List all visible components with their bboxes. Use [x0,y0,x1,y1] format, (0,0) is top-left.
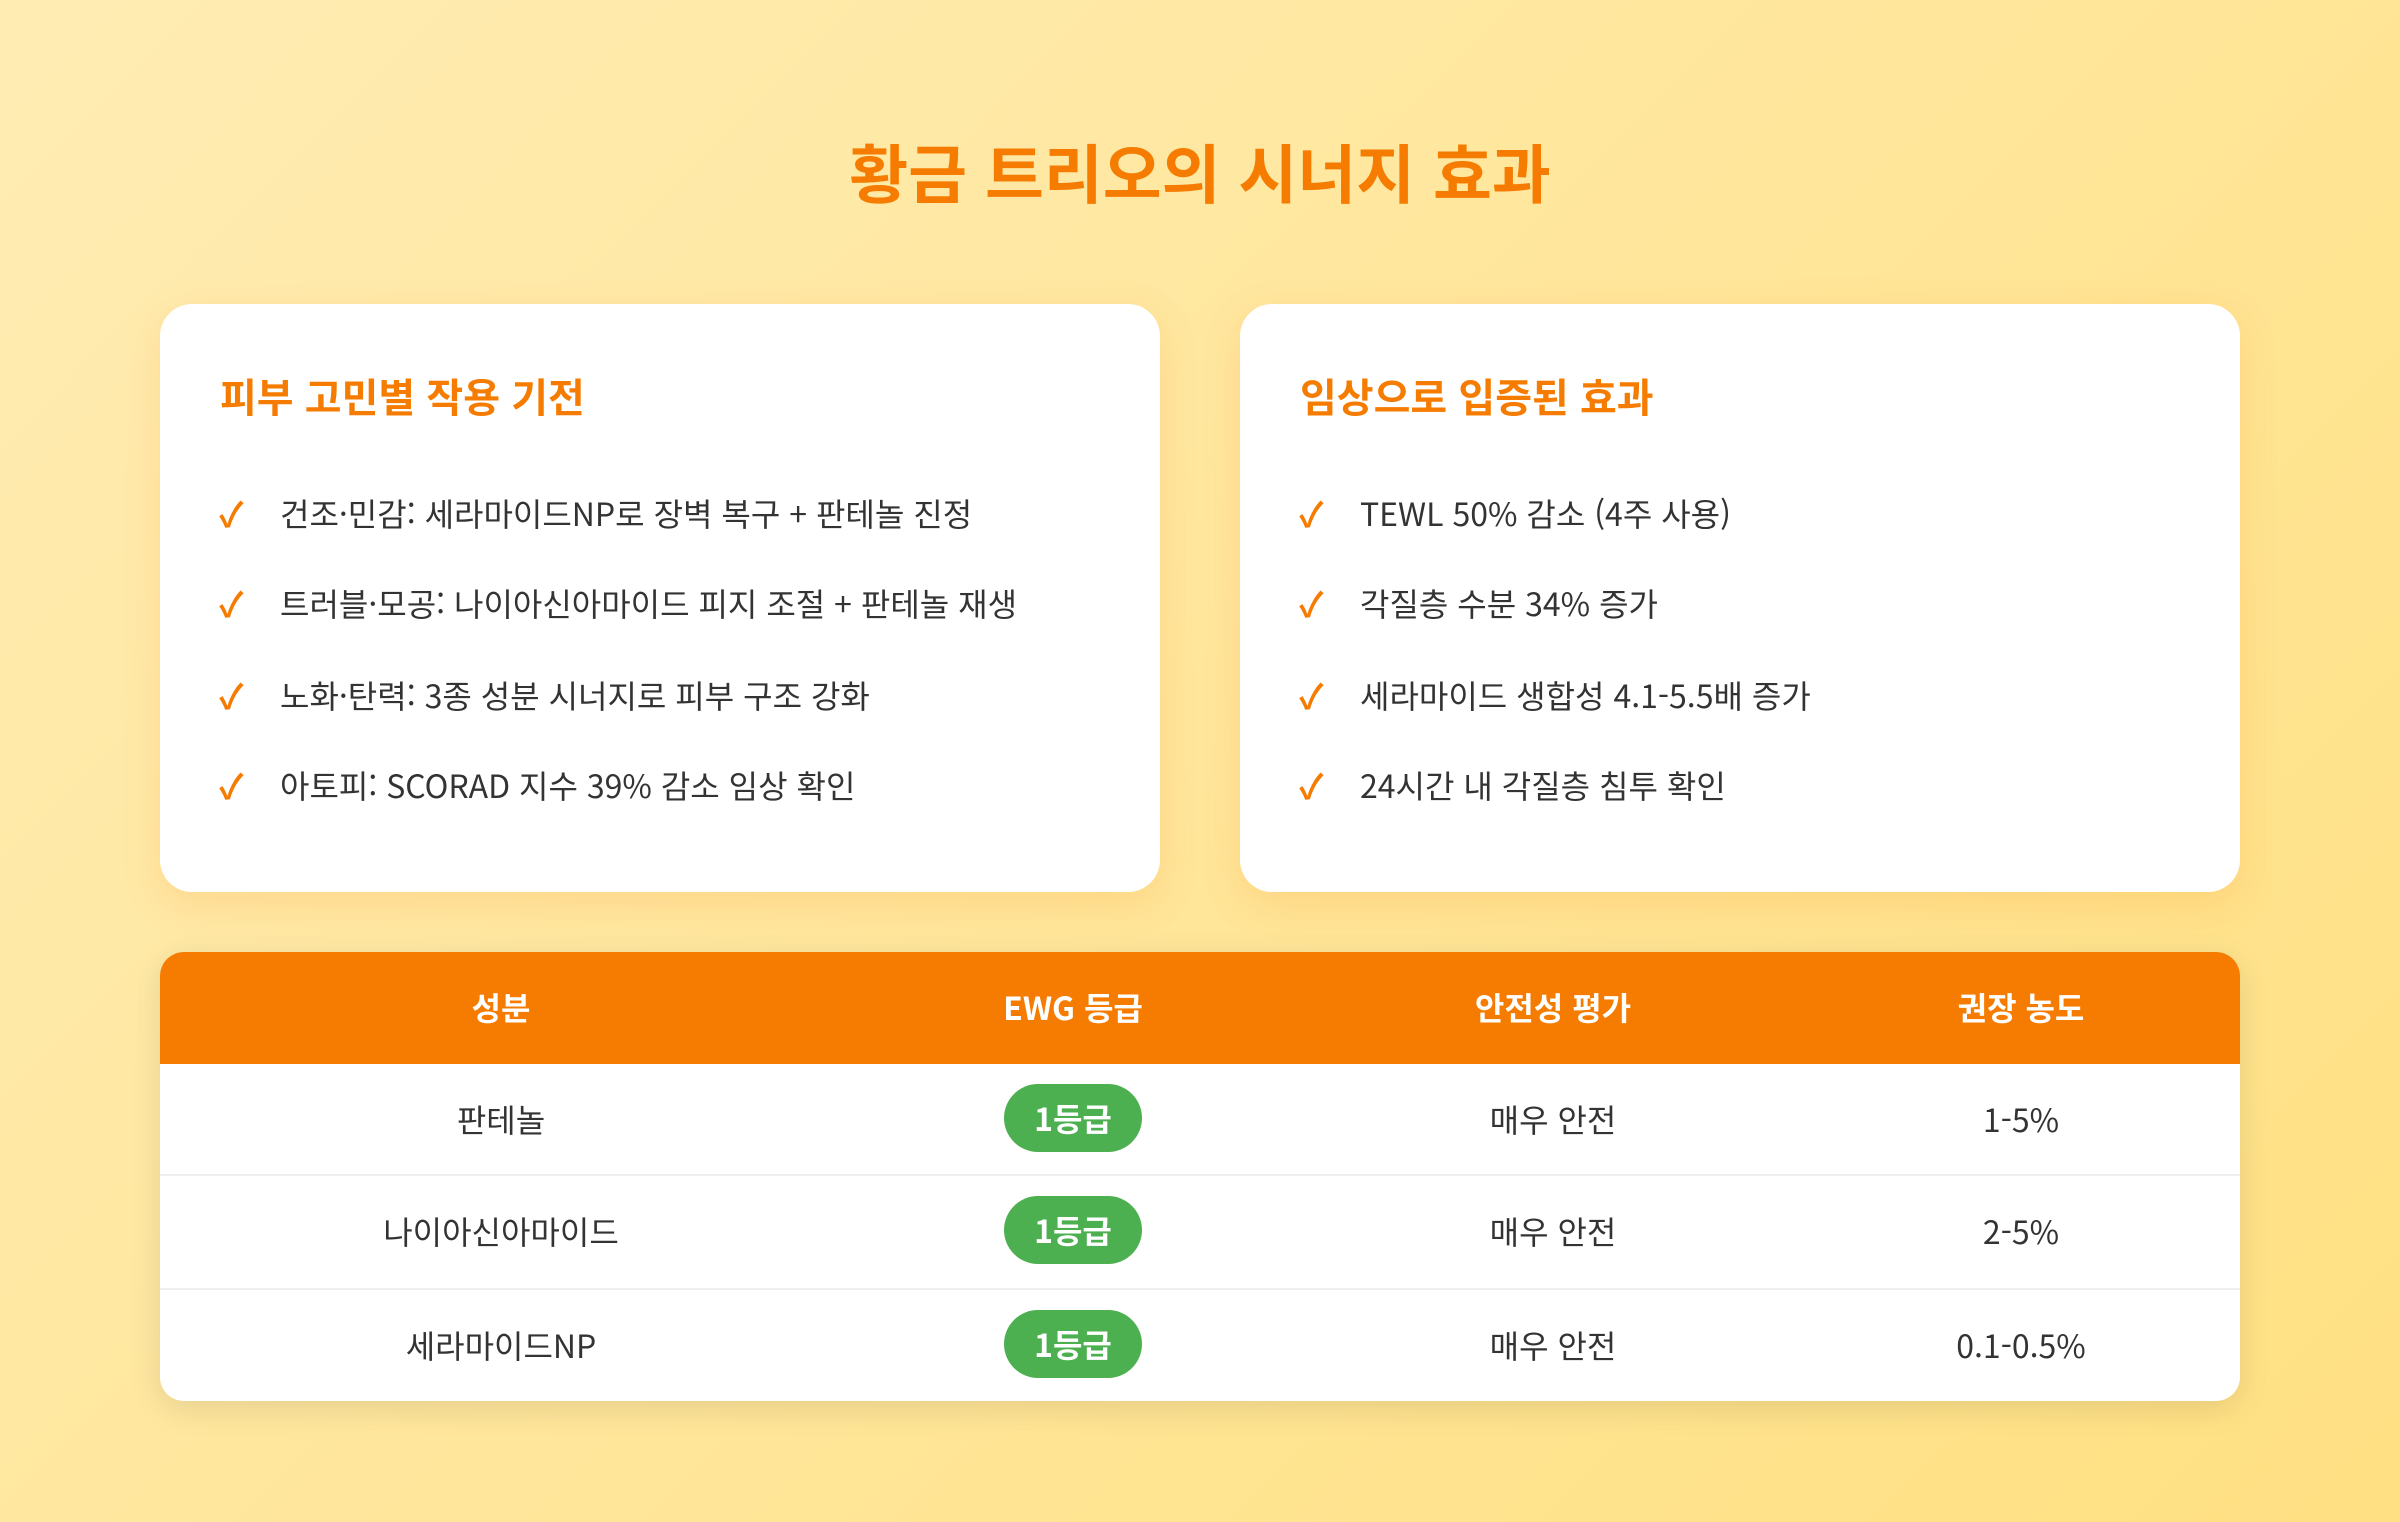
list item: aging and elasticity: ✓ [219,670,244,719]
table row: ceramide NP: 0.1-0.5% [1956,1322,2086,1368]
panel: clinically proven effects [1240,304,2240,892]
list item: penetration: 24시간 내 각질층 침투 확인 [1360,762,1726,808]
list item: dry and sensitive: ✓ [219,488,244,537]
title: 황금 트리오의 시너지 효과 [849,125,1551,217]
table header row: 성분 [472,984,530,1030]
list item: acne and pores: 트러블·모공: 나이아신아마이드 피지 조절 + 판테놀 재생 [280,580,1017,626]
table row: ceramide NP: 세라마이드NP [406,1322,596,1368]
grade badge [1004,1310,1142,1378]
table: ingredient safety [160,952,2240,1401]
list item: hydration: ✓ [1299,578,1324,627]
table row: niacinamide [383,1196,2059,1264]
list item: TEWL: ✓ [1299,488,1324,537]
grade badge: 1등급 [1034,1095,1112,1141]
panel heading: mechanism: 피부 고민별 작용 기전 [220,366,585,424]
list item: ceramide synthesis: ✓ [1299,670,1324,719]
table row: niacinamide: 매우 안전 [1490,1208,1616,1254]
table row: ceramide NP: 매우 안전 [1490,1322,1616,1368]
table row: panthenol [457,1084,2059,1152]
list item: acne and pores: ✓ [219,578,244,627]
table header row: EWG 등급 [1003,984,1143,1030]
table row: panthenol: 1-5% [1983,1096,2059,1142]
panel heading: clinical effects: 임상으로 입증된 효과 [1300,366,1654,424]
list item: atopy: ✓ [219,760,244,809]
table row: niacinamide: 나이아신아마이드 [383,1208,619,1254]
table row: ceramide NP [406,1310,2086,1378]
table row: panthenol: 매우 안전 [1490,1096,1616,1142]
list item: ceramide synthesis: 세라마이드 생합성 4.1-5.5배 증가 [1360,672,1811,718]
grade badge: 1등급 [1034,1321,1112,1367]
grade badge [1004,1084,1142,1152]
table header row: 안전성 평가 [1475,984,1631,1030]
list item: atopy: 아토피: SCORAD 지수 39% 감소 임상 확인 [280,762,855,808]
list item: TEWL: TEWL 50% 감소 (4주 사용) [1360,490,1731,536]
table row: niacinamide: 2-5% [1983,1208,2059,1254]
table header row [160,952,2240,1064]
list item: aging and elasticity: 노화·탄력: 3종 성분 시너지로 피부 구조 강화 [280,672,870,718]
grade badge: 1등급 [1034,1207,1112,1253]
list item: hydration: 각질층 수분 34% 증가 [1360,580,1658,626]
list item: dry and sensitive: 건조·민감: 세라마이드NP로 장벽 복구 + 판테놀 진정 [280,490,972,536]
table row: panthenol: 판테놀 [457,1096,545,1142]
table header row: 권장 농도 [1958,984,2084,1030]
list item: penetration: ✓ [1299,760,1324,809]
grade badge [1004,1196,1142,1264]
panel: mechanism by skin concern [160,304,1160,892]
